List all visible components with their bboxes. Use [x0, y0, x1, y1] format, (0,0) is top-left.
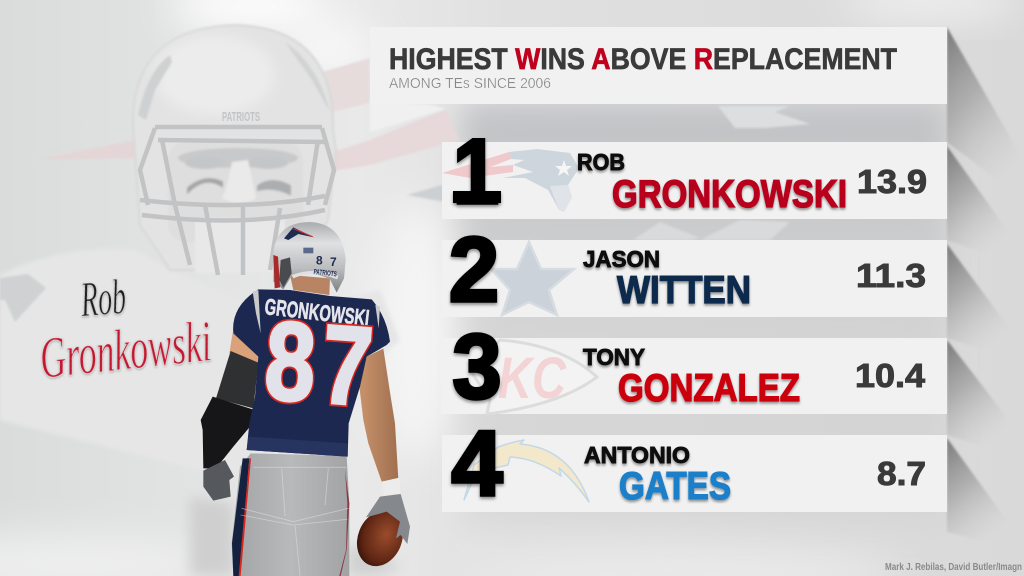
first name: TONY	[583, 344, 645, 370]
left elbow sleeve	[216, 351, 258, 408]
last name: GATES	[619, 465, 731, 508]
player photo	[190, 222, 411, 576]
first name: ANTONIO	[584, 442, 690, 468]
ghost face	[168, 142, 303, 273]
ghost swoosh left	[35, 140, 135, 160]
value: 10.4	[855, 357, 926, 394]
heading: HIGHEST WINS ABOVE REPLACEMENT	[389, 43, 897, 76]
helmet wordmark: PATRIOTS	[313, 267, 337, 278]
ghost shoulder logo	[0, 274, 46, 322]
ghost star pieces	[718, 106, 810, 128]
panel: rank 1	[442, 121, 947, 223]
ghost helmet dome	[133, 25, 336, 270]
jersey number seven: 7	[318, 301, 376, 429]
jersey number seven: 7	[318, 301, 376, 429]
last name: GRONKOWSKI	[612, 173, 847, 216]
wrist tape	[382, 478, 401, 495]
left forearm pad	[201, 397, 253, 468]
signature last name: Gronkowski	[37, 308, 214, 391]
last name: GONZALEZ	[618, 367, 800, 410]
icon: Chiefs arrowhead	[470, 340, 597, 414]
pants	[232, 453, 349, 576]
ghost light band	[370, 100, 446, 132]
neck	[290, 275, 330, 295]
subtitle: AMONG TEs SINCE 2006	[389, 76, 551, 92]
football	[349, 504, 411, 573]
right arm	[359, 349, 398, 482]
first name: JASON	[583, 246, 660, 272]
helmet	[273, 222, 346, 293]
signature first name: Rob	[78, 268, 128, 327]
first name: ROB	[577, 149, 625, 175]
jersey	[233, 289, 390, 457]
long shadows behind panels	[947, 27, 1024, 548]
value: 8.7	[877, 455, 926, 492]
darker zone behind rows	[462, 104, 947, 524]
signature	[37, 268, 214, 391]
shadow title	[947, 27, 1024, 200]
ghost helmet wordmark: PATRIOTS	[222, 109, 260, 124]
jersey number eight: 8	[262, 298, 319, 425]
shadow row 3	[947, 340, 1008, 455]
value: 11.3	[856, 257, 926, 294]
ghost facemask	[140, 127, 334, 275]
helmet: 7	[330, 255, 337, 269]
ground shadow	[190, 497, 403, 576]
shadow row 1	[947, 146, 1010, 262]
panel: title	[370, 27, 947, 104]
helmet number: 8	[316, 254, 323, 268]
shadow row 2	[947, 244, 1010, 358]
shadow row 4	[947, 438, 1012, 548]
icon: Patriots logo	[442, 149, 579, 212]
jersey number eight: 8	[262, 298, 319, 425]
ghost dome decal right	[285, 42, 330, 112]
last name: WITTEN	[617, 269, 751, 312]
ghost swoosh bottom right	[333, 109, 459, 171]
panel: rank 4	[442, 413, 947, 515]
icon: Chiefs arrowhead: KC	[498, 346, 567, 411]
ghost wedge	[407, 184, 445, 202]
ghost swoosh top right	[322, 58, 370, 112]
icon: Cowboys star	[491, 242, 574, 315]
rank number: 1	[453, 121, 499, 223]
rank number: 3	[452, 316, 502, 418]
ghost shoulders	[0, 249, 400, 480]
ghost helmet bright top	[155, 35, 275, 115]
background ghost Patriots logo	[35, 58, 810, 240]
right glove	[366, 494, 410, 544]
rank number: 4	[452, 413, 502, 515]
ghost dome decal left	[138, 55, 172, 120]
ghost helmet portrait	[0, 25, 400, 480]
rank number: 2	[449, 219, 499, 321]
panel: rank 2	[442, 219, 947, 321]
left glove	[203, 460, 234, 501]
icon: Chargers bolt	[464, 440, 589, 502]
value: 13.9	[857, 163, 927, 200]
left upper arm	[229, 333, 260, 367]
panel: rank 3	[441, 316, 947, 418]
jersey name: GRONKOWSKI	[263, 293, 371, 331]
